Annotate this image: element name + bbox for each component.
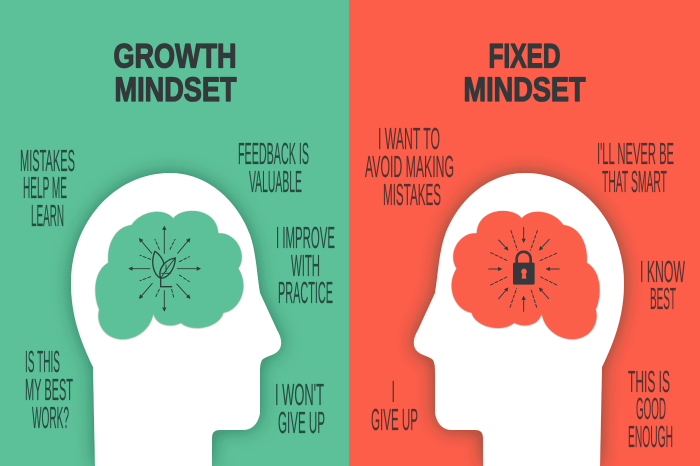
icon: leaf with radiating arrows	[130, 227, 199, 310]
text: i know best	[640, 255, 685, 316]
text: GIVE UP	[371, 403, 418, 437]
heading: fixed mindset	[464, 38, 586, 109]
text: FEEDBACK IS	[238, 137, 309, 171]
heading: growth mindset: GROWTH	[114, 38, 236, 76]
text: VALUABLE	[249, 165, 302, 199]
panel: growth mindset background	[0, 0, 349, 466]
heading: fixed mindset: FIXED	[488, 38, 560, 76]
text: mistakes help me learn	[20, 144, 75, 233]
text: i'll never be that smart	[597, 137, 674, 199]
text: PRACTICE	[278, 276, 333, 310]
text: i give up: I	[392, 375, 395, 409]
text: MISTAKES	[383, 178, 441, 212]
icon: padlock with inward arrows	[489, 227, 559, 311]
text: HELP ME	[23, 171, 67, 205]
growth head silhouette	[71, 173, 281, 466]
text: LEARN	[31, 199, 64, 233]
text: i improve with practice	[276, 221, 335, 310]
growth brain	[95, 211, 243, 339]
text: i give up	[371, 375, 418, 437]
text: I WON'T	[275, 378, 324, 412]
text: is this my best work	[25, 345, 73, 435]
text: MISTAKES	[20, 144, 75, 178]
heading: growth mindset	[114, 38, 237, 109]
fixed brain	[452, 211, 600, 339]
fixed head silhouette	[414, 173, 624, 466]
text: IS THIS	[25, 345, 60, 379]
text: feedback is valuable	[238, 137, 309, 199]
text: I WANT TO	[378, 122, 440, 156]
heading: fixed mindset: MINDSET	[464, 71, 586, 109]
text: MY BEST	[25, 373, 73, 407]
text: i won't give up	[275, 378, 325, 440]
panel: fixed mindset background	[349, 0, 700, 466]
text: AVOID MAKING	[365, 150, 454, 184]
text: GIVE UP	[278, 406, 325, 440]
heading: growth mindset: MINDSET	[114, 71, 237, 109]
text: I IMPROVE	[276, 221, 335, 255]
text: WORK?	[32, 401, 69, 435]
text: i improve with practice: WITH	[291, 249, 320, 283]
text: i want to avoid making mistakes	[365, 122, 454, 212]
text: this is good enough	[628, 365, 673, 454]
